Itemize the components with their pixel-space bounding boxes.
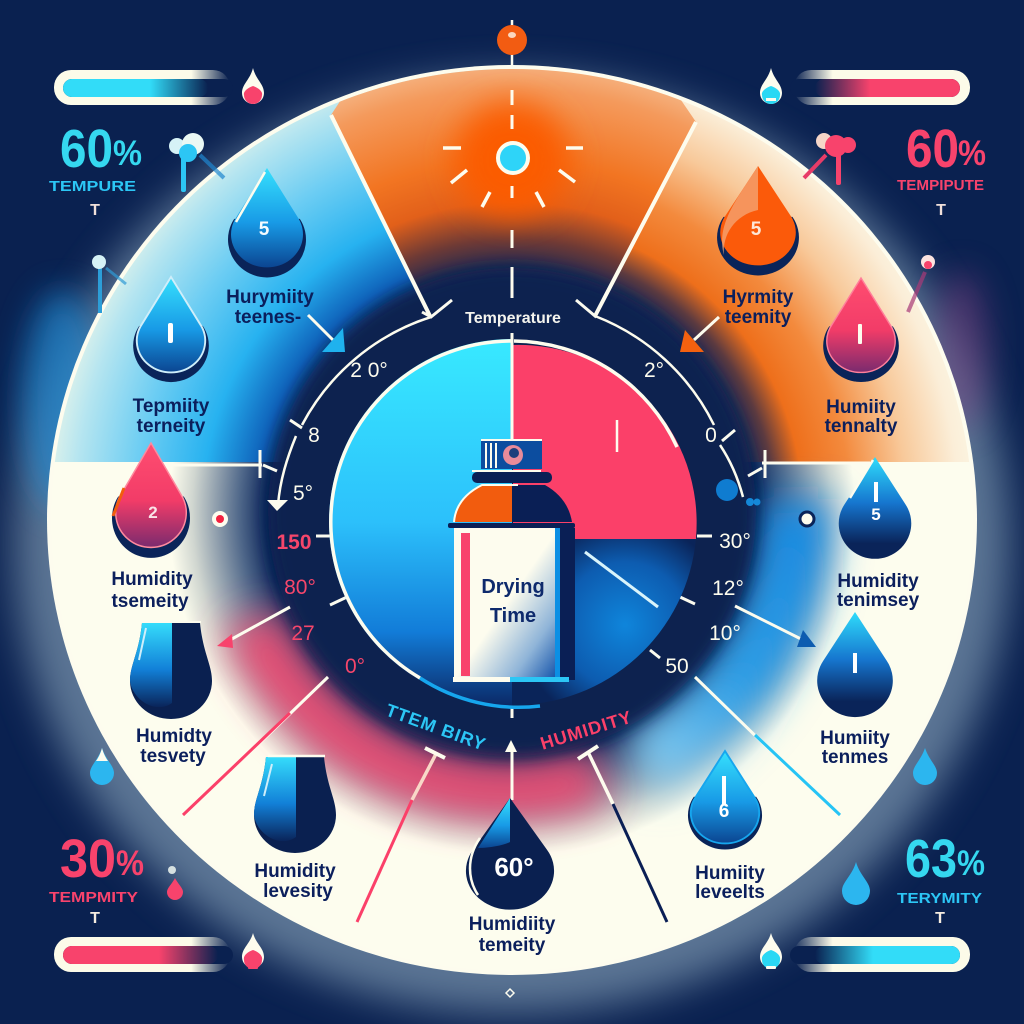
icon: bottom right drops	[842, 748, 937, 905]
stat: top right: 60	[906, 119, 959, 179]
gauge labels: 10°	[709, 622, 741, 645]
label: left lower	[136, 726, 212, 767]
label: bottom: temeity	[479, 935, 546, 956]
icon: top right cloud	[804, 133, 856, 185]
drop: upper-left 5: 5	[259, 219, 270, 240]
gauge labels: 8	[308, 424, 320, 447]
gauge labels: 50	[665, 655, 689, 678]
label: upper-left	[226, 287, 314, 328]
drop: bottom 60	[466, 798, 554, 910]
pie cyan half	[329, 339, 512, 705]
bottle shoulder	[454, 485, 512, 522]
panel: top orange wedge	[331, 69, 696, 292]
label: left	[133, 396, 210, 437]
icon: right pin	[908, 255, 935, 312]
label: upper-left: Hurymiity	[226, 287, 314, 308]
label: left pink	[111, 569, 193, 612]
curved axis labels: TTEM BIRY	[383, 700, 489, 755]
bottom marker	[506, 989, 514, 997]
label: right lower: Humiity	[820, 728, 890, 749]
drop: right 1	[817, 612, 893, 717]
label: lower right: Humiity	[695, 863, 765, 884]
gauge labels: 0	[705, 424, 717, 447]
label: right upper	[825, 397, 898, 437]
drop: lower right 6: 6	[719, 801, 729, 822]
stat: bottom left: 30	[60, 829, 116, 889]
label: upper-left: teenes-	[235, 307, 301, 328]
label: bottom: Humidiity	[469, 914, 556, 935]
gauge labels: 0°	[345, 655, 365, 678]
gauge labels: 12°	[712, 577, 744, 600]
label: lower right	[695, 863, 765, 903]
dashed vertical axis	[510, 90, 514, 800]
stat: bottom right: T	[935, 910, 945, 927]
curved axis labels	[383, 700, 635, 755]
gauge labels: 80°	[284, 576, 316, 599]
label: right lower	[820, 728, 890, 768]
icon: bottom left drop	[90, 748, 183, 900]
lower left pink haze	[250, 620, 600, 791]
lower half	[174, 462, 850, 849]
lower connector lines	[183, 677, 840, 922]
drop: left cup	[130, 622, 212, 719]
label: upper right: teemity	[725, 307, 792, 328]
stat: bottom right	[760, 829, 985, 972]
drop: right pink 1	[823, 278, 899, 382]
stat: bottom left	[49, 829, 264, 972]
stat: bottom left: %	[116, 844, 144, 883]
outer gauge arc	[260, 300, 765, 658]
bottle text: Drying	[481, 576, 545, 598]
stat: top right: T	[936, 202, 946, 219]
stat: top left: 60	[60, 119, 113, 179]
curved axis labels: HUMIDITY	[538, 707, 635, 754]
label: right upper: Humiity	[826, 397, 896, 418]
label: lower left: Humidity	[254, 861, 336, 882]
label: upper right: Hyrmity	[723, 287, 794, 308]
label: right	[837, 571, 920, 611]
icon: top orange marker	[497, 20, 527, 68]
drop: upper-left 5	[228, 168, 306, 277]
gauge labels: 2°	[644, 359, 664, 382]
stat: top left: %	[113, 134, 142, 173]
stat: bottom right: 63	[905, 829, 957, 889]
pie lower-right quarter	[512, 538, 696, 705]
drop: left 1	[133, 277, 209, 382]
pie outline	[331, 341, 677, 678]
label: left pink: tsemeity	[111, 591, 189, 612]
drop: right 5	[839, 457, 911, 559]
central dark blur	[268, 268, 756, 756]
drop: bottom 60: 60°	[494, 852, 534, 882]
disc sectors	[54, 69, 969, 852]
wedge edge lines	[331, 115, 696, 316]
sun glow	[454, 102, 570, 218]
label: right: Humidity	[837, 571, 919, 592]
drop: lower left cup	[254, 756, 336, 853]
label: lower left: levesity	[263, 881, 333, 902]
gauge labels: 5°	[293, 482, 313, 505]
drop: lower right 6	[688, 751, 762, 850]
heading: temperature: Temperature	[465, 310, 561, 327]
bottle cap	[481, 440, 542, 469]
drop: left pink 2: 2	[148, 503, 158, 522]
icon: spray bottle: Time	[490, 605, 536, 627]
icon: top left cloud	[169, 133, 224, 192]
label: lower right: leveelts	[695, 882, 765, 903]
stat: top right: TEMPIPUTE	[897, 177, 984, 194]
label: left lower: tesvety	[140, 746, 206, 767]
stat: top left: TEMPURE	[49, 178, 136, 195]
label: left lower: Humidty	[136, 726, 212, 747]
label: right upper: tennalty	[825, 416, 898, 437]
pointer arrows	[212, 315, 816, 648]
gauge labels: 30°	[719, 530, 751, 553]
drop: upper right orange 5: 5	[751, 219, 762, 240]
icon: sun	[443, 143, 583, 207]
panel: upper-right orange sector	[605, 100, 969, 462]
gauge labels: 27	[291, 622, 315, 645]
stat: top left: T	[90, 202, 100, 219]
gauge labels	[276, 359, 751, 678]
drop: right 5: 5	[871, 505, 881, 524]
label: left: terneity	[137, 416, 206, 437]
label: right: tenimsey	[837, 590, 920, 611]
stat: bottom left: T	[90, 910, 100, 927]
stat: top right	[760, 68, 986, 219]
pie pink quarter	[513, 345, 697, 538]
label: right lower: tenmes	[822, 747, 888, 768]
lower right blue haze	[640, 500, 796, 765]
panel: upper-left blue sector	[54, 69, 502, 462]
label: upper right	[723, 287, 794, 328]
label: left: Tepmiity	[133, 396, 210, 417]
stat: bottom right: TERYMITY	[897, 890, 982, 907]
divider lines	[160, 463, 870, 465]
gauge labels: 150	[276, 531, 312, 554]
label: bottom	[469, 914, 556, 956]
icon: spray bottle	[448, 440, 575, 682]
bottle body	[454, 528, 575, 680]
gauge labels: 2 0°	[350, 359, 388, 382]
drop: left pink 2	[112, 443, 190, 558]
label: left pink: Humidity	[111, 569, 193, 590]
stat: bottom right: %	[957, 844, 985, 883]
stat: bottom left: TEMPMITY	[49, 889, 138, 906]
stat: top left	[49, 68, 264, 219]
panel: central pie	[329, 333, 697, 707]
label: lower left	[254, 861, 336, 902]
stat: top right: %	[958, 134, 986, 173]
icon: left pin	[92, 255, 126, 313]
drop: upper right orange 5	[717, 166, 799, 275]
